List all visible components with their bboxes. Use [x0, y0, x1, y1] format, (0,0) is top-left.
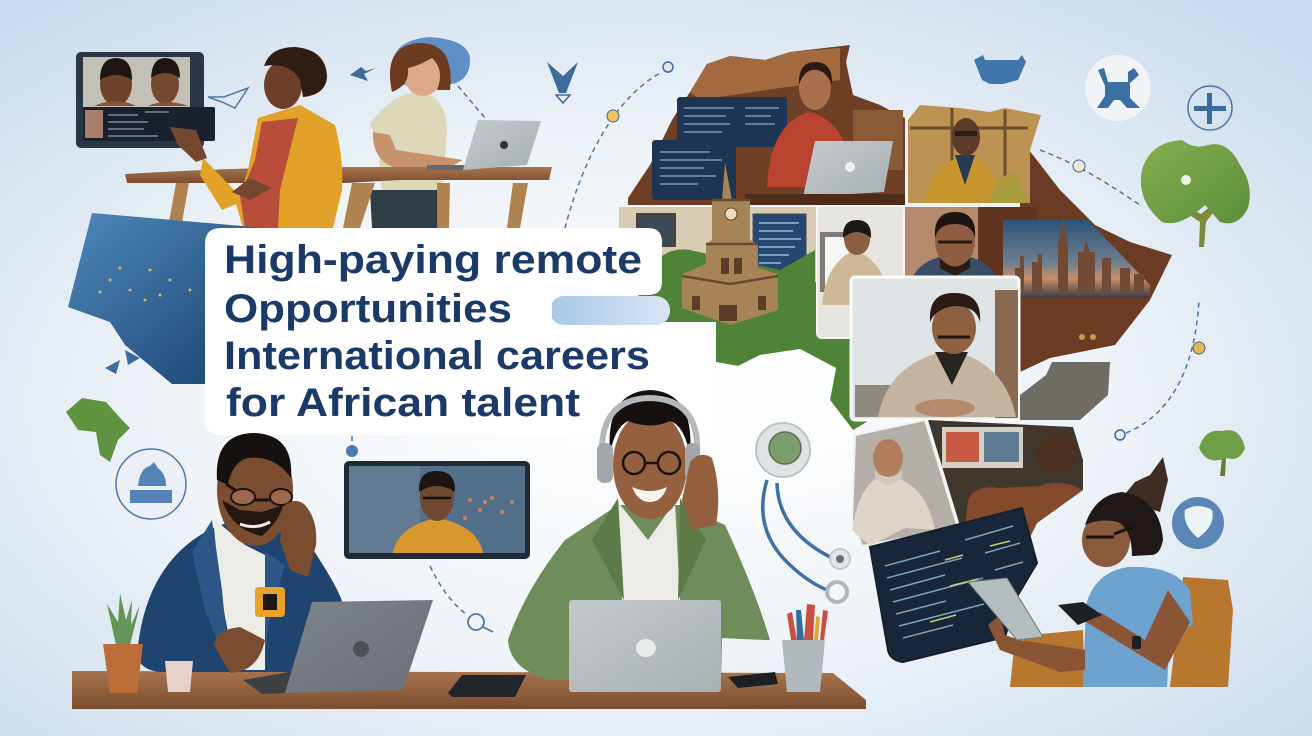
- panel: man in yellow jacket: [908, 105, 1041, 203]
- icon: plus circle: [1188, 86, 1232, 130]
- badge: [255, 587, 285, 617]
- map: gold door knobs: [1079, 334, 1096, 340]
- round sensor device with cables: [756, 423, 850, 602]
- panel: man with glasses: [905, 207, 1038, 279]
- icon: small tree: [1199, 430, 1245, 476]
- tablet on desk and phone: [448, 675, 526, 697]
- icon: chevron marker: [547, 62, 578, 93]
- woman with tablet and chair: [870, 457, 1233, 687]
- magnifier: [468, 614, 493, 632]
- map hair piece: [1120, 457, 1168, 512]
- center laptop: [569, 600, 721, 692]
- decorative pill: [550, 296, 670, 325]
- icons right: [974, 55, 1250, 549]
- table legs: [168, 183, 528, 228]
- woman in cream shirt: [370, 43, 463, 228]
- panel: city skyline: [1003, 217, 1150, 298]
- icon: bell circle: [116, 449, 186, 519]
- icon: network circle: [1085, 55, 1151, 121]
- title text: [224, 238, 650, 425]
- phone: [1058, 602, 1102, 625]
- code panel: [870, 508, 1037, 662]
- icon: round blue badge: [1172, 497, 1224, 549]
- map of Africa collage: [619, 45, 1172, 546]
- glasses: [1086, 526, 1135, 537]
- title card: [205, 228, 853, 530]
- icon: paper plane: [208, 88, 248, 108]
- icon: small arrows: [105, 350, 140, 374]
- torso: [1083, 567, 1193, 687]
- panel: man in beige: [817, 206, 904, 338]
- tablet: [968, 578, 1043, 640]
- map: brown base: [1020, 150, 1172, 372]
- icon: arrow: [350, 67, 376, 81]
- laptop on table: [427, 120, 541, 170]
- armchair: [1010, 577, 1233, 687]
- front desk: [72, 671, 866, 709]
- white map cutout: [700, 349, 853, 530]
- panel: woman in brown with floor plans: [928, 420, 1083, 537]
- icon: Africa map green: [66, 398, 130, 462]
- panel: seated older man: [852, 420, 958, 546]
- left man with phone: [137, 433, 343, 673]
- pencil cup: [782, 604, 828, 692]
- left team: two women at table: [76, 37, 552, 228]
- panel: central video call person: [851, 277, 1019, 420]
- video tablet: [76, 52, 215, 148]
- center man with headset: [508, 390, 770, 680]
- hair: [1085, 492, 1163, 556]
- title text: for African talent: [226, 381, 580, 425]
- icon: basket: [974, 55, 1026, 84]
- plant and cup: [103, 593, 193, 693]
- data map panel left: [68, 213, 265, 384]
- watch: [1132, 636, 1141, 649]
- icons left: [66, 62, 578, 519]
- head: [1082, 513, 1130, 567]
- title text: Opportunities: [224, 287, 512, 331]
- panel: woman at laptop: [628, 45, 905, 205]
- left laptop: [243, 600, 433, 694]
- decorative connector lines: [352, 72, 1199, 615]
- title text: High-paying remote: [224, 238, 642, 282]
- arms: [988, 615, 1085, 672]
- panel: clock tower building: [682, 163, 778, 325]
- white panel: [205, 228, 716, 435]
- title text: International careers: [224, 334, 650, 378]
- woman in yellow blazer: [170, 47, 342, 228]
- video screen man in yellow: [344, 461, 530, 559]
- icon: large tree: [1141, 140, 1250, 247]
- wood table: [125, 167, 552, 183]
- panel: room with code screens: [619, 207, 816, 300]
- blue blob behind head: [392, 37, 470, 85]
- map: green area: [636, 270, 870, 430]
- map: rock texture: [1020, 362, 1110, 420]
